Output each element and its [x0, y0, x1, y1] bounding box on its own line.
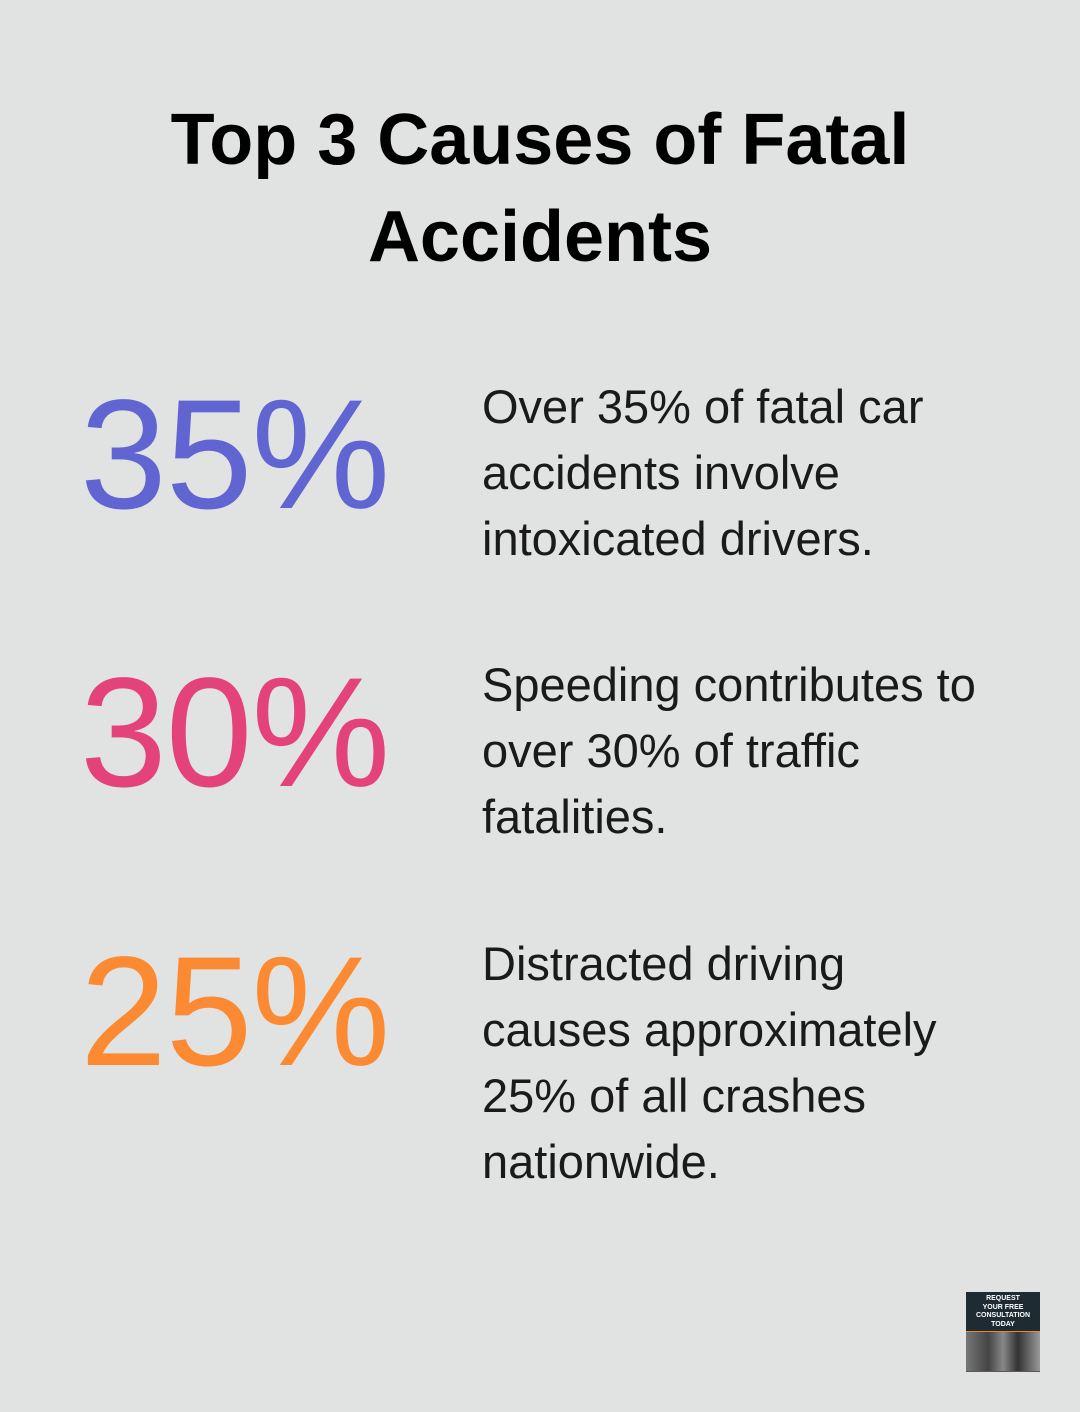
stat row: intoxicated: [80, 368, 923, 565]
description 2: [482, 658, 976, 843]
description 2: Speeding contributes to: [482, 658, 976, 711]
title: Accidents: [368, 197, 712, 277]
title: Top 3 Causes of Fatal: [171, 100, 909, 180]
stat row: distracted: [80, 925, 937, 1188]
badge text: YOUR FREE: [983, 1304, 1023, 1310]
badge text: CONSULTATION: [976, 1312, 1030, 1319]
stat row: speeding: [80, 646, 976, 843]
badge text: [966, 1292, 1040, 1332]
big number 35%: 35%: [80, 368, 389, 542]
description 2: fatalities.: [482, 790, 667, 843]
title: [171, 100, 909, 277]
description 3: 25% of all crashes: [482, 1069, 866, 1122]
big number 30%: 30%: [80, 646, 389, 820]
badge text: REQUEST: [986, 1295, 1020, 1302]
description 3: Distracted driving: [482, 937, 845, 990]
badge text: TODAY: [991, 1320, 1015, 1328]
description 2: over 30% of traffic: [482, 724, 860, 777]
description 3: causes approximately: [482, 1003, 937, 1056]
description 1: [482, 380, 923, 565]
badge: consultation: [966, 1292, 1040, 1372]
big number 25%: 25%: [80, 925, 389, 1099]
description 3: [482, 937, 937, 1188]
badge photo: [966, 1332, 1040, 1371]
description 1: intoxicated drivers.: [482, 512, 874, 565]
description 3: nationwide.: [482, 1135, 720, 1188]
description 1: accidents involve: [482, 446, 840, 499]
description 1: Over 35% of fatal car: [482, 380, 923, 433]
